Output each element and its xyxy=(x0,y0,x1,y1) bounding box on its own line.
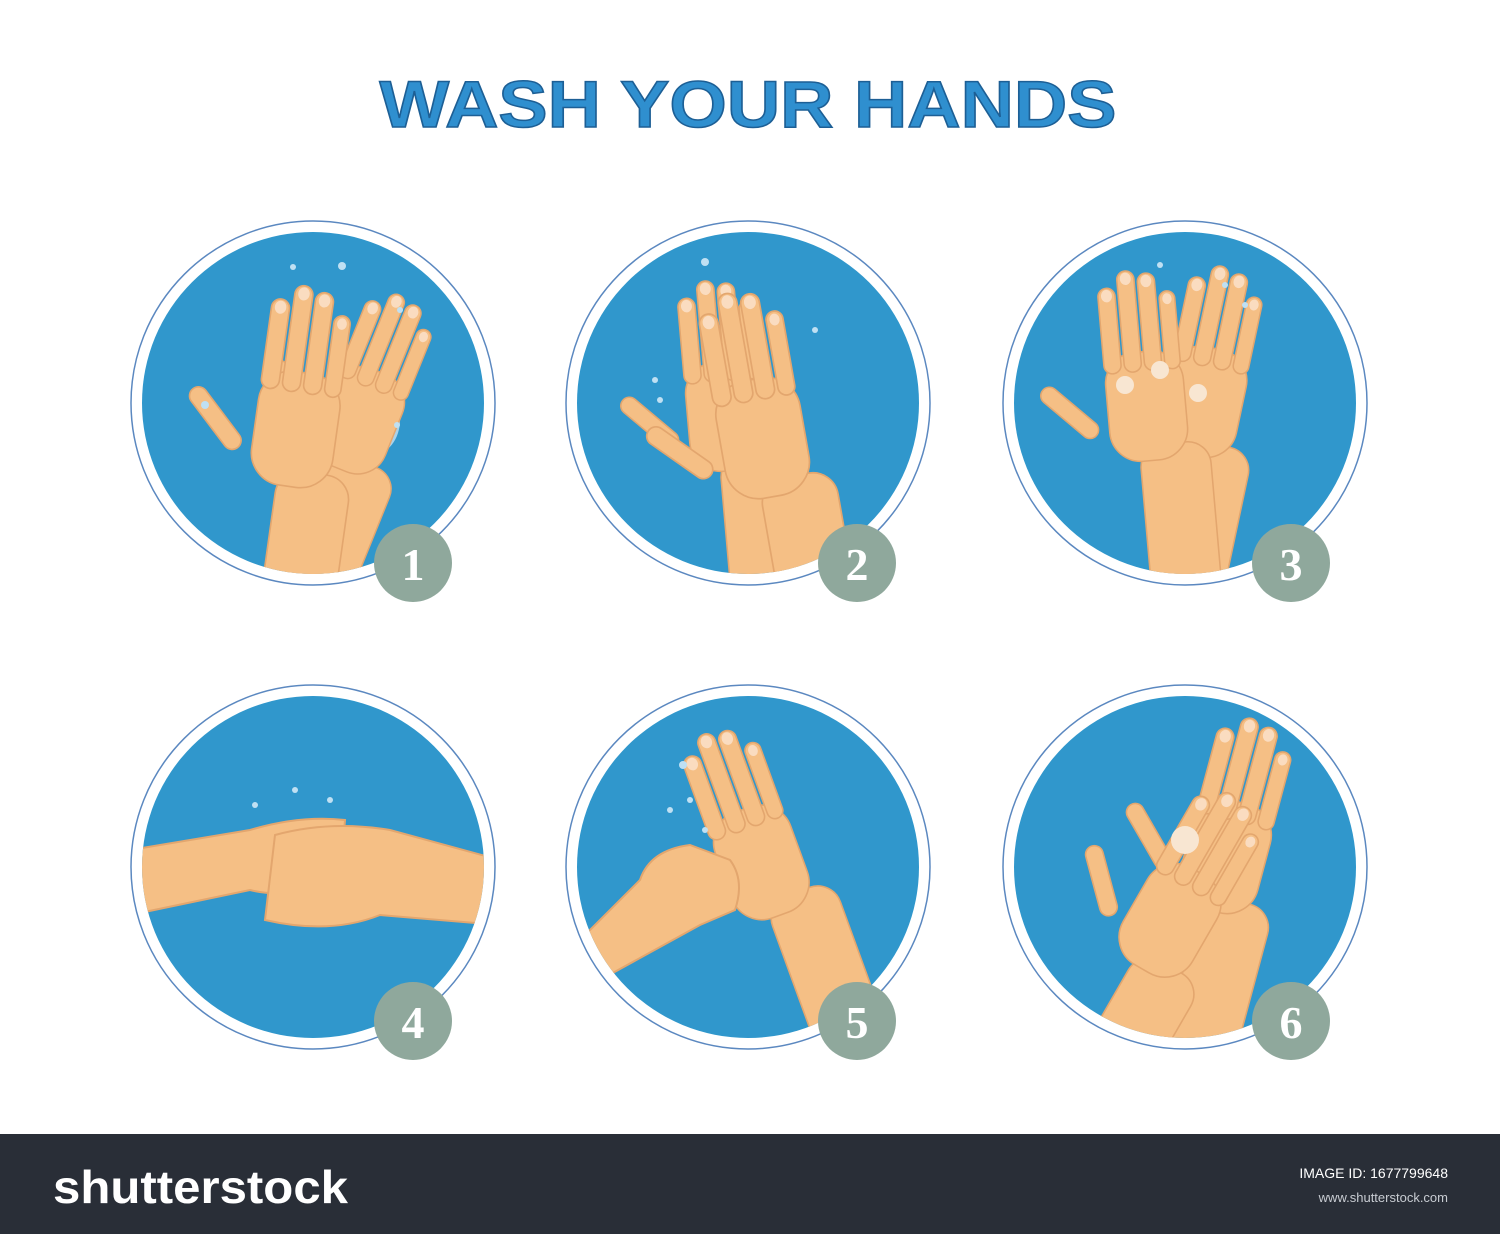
badge 6: 6 xyxy=(1280,997,1302,1048)
footer bar: IMAGE ID: 1677799648 xyxy=(1299,1165,1448,1181)
step 2 xyxy=(565,220,931,602)
step 4 xyxy=(130,685,500,1060)
step 6 xyxy=(1002,684,1368,1060)
badge 6 xyxy=(1252,982,1330,1060)
footer bar: shutterstock xyxy=(53,1161,348,1213)
badge 4 xyxy=(374,982,452,1060)
badge 5 xyxy=(818,982,896,1060)
footer bar: www.shutterstock.com xyxy=(1318,1190,1448,1205)
badge 2: 2 xyxy=(846,539,868,590)
title: WASH YOUR HANDS xyxy=(380,67,1116,141)
badge 5: 5 xyxy=(846,997,868,1048)
footer bar xyxy=(0,1134,1500,1234)
badge 1: 1 xyxy=(402,539,424,590)
badge 2 xyxy=(818,524,896,602)
step 5 xyxy=(565,684,931,1060)
badge 4: 4 xyxy=(402,997,424,1048)
step 1 xyxy=(130,220,496,602)
badge 1 xyxy=(374,524,452,602)
badge 3: 3 xyxy=(1280,539,1302,590)
step 3 xyxy=(1002,220,1368,602)
badge 3 xyxy=(1252,524,1330,602)
